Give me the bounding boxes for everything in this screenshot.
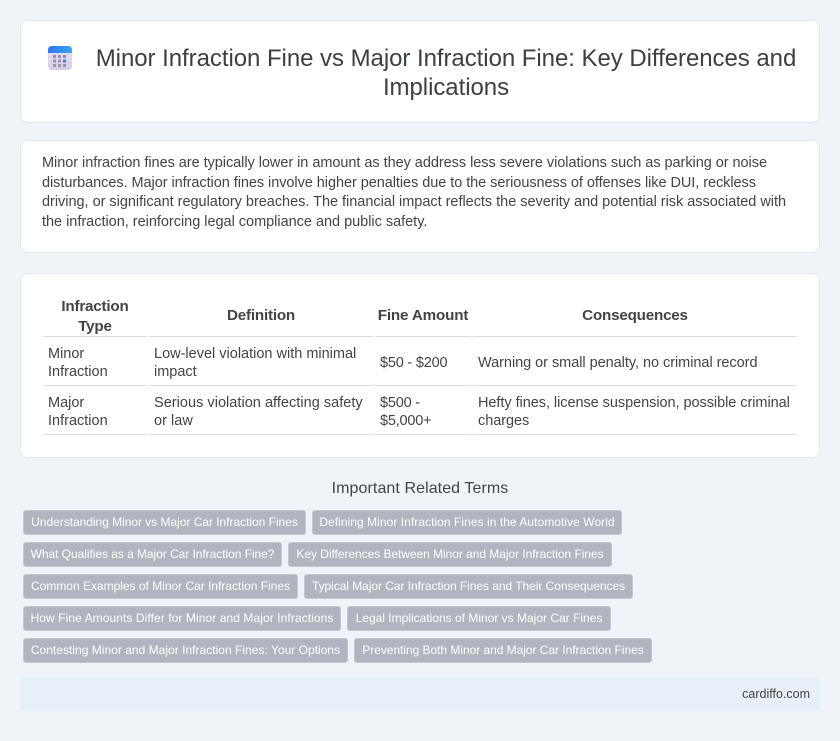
tag: Contesting Minor and Major Infraction Fines: Your Options <box>31 643 340 657</box>
tag <box>23 606 341 631</box>
table row: minor infraction: $50 - $200 <box>380 355 447 371</box>
tag: How Fine Amounts Differ for Minor and Major Infractions <box>31 611 333 625</box>
tag <box>23 574 298 599</box>
table row: major infraction: or law <box>154 413 193 429</box>
summary paragraph: disturbances. Major infraction fines involve higher penalties due to the seriousness of offenses like DUI, reckless <box>42 175 756 191</box>
table header: Definition <box>227 307 295 324</box>
heading: related terms: Important Related Terms <box>332 480 508 497</box>
summary paragraph: Minor infraction fines are typically lower in amount as they address less severe violations such as parking or noise <box>42 155 767 171</box>
tag <box>312 510 622 535</box>
table header: Fine Amount <box>378 307 468 324</box>
table row: minor infraction: Minor <box>48 346 84 362</box>
footer bar <box>20 677 820 711</box>
tag <box>23 542 282 567</box>
table row: minor infraction: impact <box>154 364 197 380</box>
table header: Type <box>78 318 112 334</box>
table row: major infraction: Hefty fines, license suspension, possible criminal <box>478 395 790 411</box>
title: Minor Infraction Fine vs Major Infraction Fine: Key Differences and <box>96 45 796 72</box>
title <box>96 45 796 101</box>
panel: comparison table <box>20 273 820 458</box>
header panel <box>20 20 820 123</box>
tag: Preventing Both Minor and Major Car Infraction Fines <box>362 643 644 657</box>
table row: minor infraction: Infraction <box>48 364 108 380</box>
table header <box>61 298 688 334</box>
table row: major infraction: $5,000+ <box>380 413 431 429</box>
table row: minor infraction <box>48 346 757 380</box>
tag: Understanding Minor vs Major Car Infraction Fines <box>31 515 298 529</box>
table row: major infraction: Infraction <box>48 413 108 429</box>
table row: minor infraction: Warning or small penalty, no criminal record <box>478 355 757 371</box>
table row: minor infraction: Low-level violation with minimal <box>154 346 356 362</box>
tag: Typical Major Car Infraction Fines and Their Consequences <box>312 579 625 593</box>
table row: major infraction: Major <box>48 395 84 411</box>
table row: major infraction: charges <box>478 413 529 429</box>
related term tags <box>23 510 652 663</box>
table row: major infraction: $500 - <box>380 395 420 411</box>
footer credit: cardiffo.com <box>742 687 810 701</box>
table header: Infraction <box>61 298 129 315</box>
table row: major infraction <box>48 395 790 429</box>
tag <box>304 574 633 599</box>
tag <box>288 542 612 567</box>
summary paragraph <box>42 155 786 230</box>
title: Implications <box>383 74 509 101</box>
tag: Defining Minor Infraction Fines in the Automotive World <box>319 515 615 529</box>
tag <box>23 510 306 535</box>
table row: major infraction: Serious violation affecting safety <box>154 395 363 411</box>
table header: Consequences <box>582 307 688 324</box>
summary paragraph: the infraction, reinforcing legal compliance and public safety. <box>42 214 427 230</box>
tag: What Qualifies as a Major Car Infraction Fine? <box>31 547 274 561</box>
panel: summary text <box>20 140 820 253</box>
tag <box>23 638 348 663</box>
tag: Legal Implications of Minor vs Major Car Fines <box>356 611 602 625</box>
tag <box>347 606 611 631</box>
tag <box>354 638 652 663</box>
icon: calendar <box>48 46 72 70</box>
tag: Key Differences Between Minor and Major Infraction Fines <box>296 547 604 561</box>
summary paragraph: driving, or significant regulatory breaches. The financial impact reflects the severity and potential risk associated with <box>42 194 786 210</box>
tag: Common Examples of Minor Car Infraction Fines <box>31 579 290 593</box>
